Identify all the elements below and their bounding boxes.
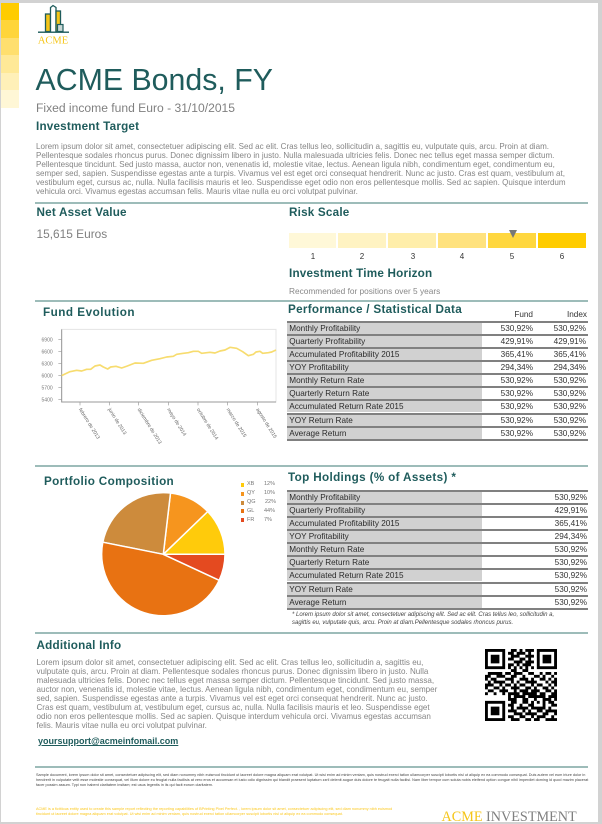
table: performance data: 294,34%: [501, 363, 533, 372]
line chart: fund evolution: febrero de 2013: [77, 407, 101, 441]
heading: net asset value: Net Asset Value: [36, 206, 127, 219]
line chart: fund evolution: junio de 2013: [106, 406, 127, 436]
footer disclaimer: Sample document, lorem ipsum dolor sit amet, consectetuer adipiscing elit, sed diam nonummy nibh euismod tincidunt ut laoreet dolore magna aliquam erat volutpat. Ut wisi enim ad minim veniam, quis nostrud exerci tation ullamcorper suscipit lobortis nisl ut aliquip ex ea commodo consequat. Duis autem vel eum iriure dolor in: [36, 772, 585, 776]
table: performance data: Accumulated Return Rate 2015: [289, 402, 404, 411]
additional info text: malesuada ultricies felis. Donec nec tellus eget massa semper dictum. Pellentesque tincidunt. Sed justo massa,: [36, 676, 434, 685]
pie legend: 22%: [265, 499, 276, 505]
table: performance data: 294,34%: [554, 363, 586, 372]
title: ACME Bonds, FY: [36, 64, 273, 97]
table: performance data: 530,92%: [501, 376, 533, 385]
heading: investment target: Investment Target: [36, 120, 139, 133]
net asset value figure: 15,615 Euros: [36, 227, 107, 241]
footer yellow note: tincidunt ut laoreet dolore magna aliquam erat volutpat. Ut wisi enim ad minim veniam, quis nostrud exerci tation ullamcorper suscipit lobortis nisl ut aliquip ex ea commodo consequat.: [36, 812, 343, 816]
investment target text: Pellentesque sodales rhoncus purus. Donec dignissim libero in justo. Nulla malesuada ultricies felis. Donec nec tellus eget massa semper dictum.: [36, 151, 554, 160]
table: performance data: Monthly Profitability: [289, 324, 360, 333]
support email: yoursupport@acmeinfomail.com: [38, 736, 178, 746]
table: performance data: 530,92%: [501, 416, 533, 425]
table: performance data: 530,92%: [554, 429, 586, 438]
subtitle: Fixed income fund Euro - 31/10/2015: [36, 100, 235, 114]
time horizon note: Recommended for positions over 5 years: [289, 286, 440, 296]
table: performance data: 530,92%: [501, 429, 533, 438]
risk scale: 3: [411, 252, 415, 261]
heading: top holdings: Top Holdings (% of Assets) *: [288, 471, 456, 484]
table: performance data: Average Return: [289, 429, 346, 438]
table: performance data: [287, 321, 588, 441]
table: top holdings: YOY Return Rate: [289, 584, 353, 594]
footer disclaimer: facer possim assum. Typi non habent claritatem insitam; est usus legentis in iis qui facit eorum claritatem.: [36, 782, 213, 786]
table: top holdings: Monthly Return Rate: [289, 544, 364, 554]
pie legend: GL: [247, 508, 254, 514]
table: top holdings: Quarterly Profitability: [289, 506, 365, 514]
pie legend: QG: [247, 499, 256, 505]
line chart: fund evolution: 6300: [42, 361, 53, 367]
table: top holdings: [287, 490, 588, 610]
table: performance data: 429,91%: [501, 337, 533, 346]
table: performance data: 530,92%: [554, 416, 586, 425]
column header: fund: Fund: [514, 310, 533, 319]
table: performance data: 530,92%: [501, 324, 533, 333]
table: top holdings: Accumulated Profitability 2015: [289, 518, 399, 528]
table: top holdings: 294,34%: [555, 532, 587, 540]
heading: portfolio composition: Portfolio Composition: [44, 475, 174, 488]
table: performance data: Quarterly Return Rate: [289, 389, 369, 398]
heading: fund evolution: Fund Evolution: [43, 306, 135, 319]
footer disclaimer: [36, 772, 588, 787]
table: performance data: Monthly Return Rate: [289, 376, 364, 385]
table: performance data: Accumulated Profitability 2015: [289, 350, 399, 359]
additional info text: vulputate quis, arcu. Proin at diam. Pellentesque sodales rhoncus purus. Donec dignissim libero in justo. Nulla: [36, 667, 428, 676]
footnote: [292, 612, 554, 626]
table: top holdings: 530,92%: [555, 584, 587, 594]
pie legend: [241, 481, 276, 523]
table: top holdings: 429,91%: [555, 506, 587, 514]
heading: risk scale: Risk Scale: [289, 206, 349, 219]
additional info text: odio non eros pellentesque mollis. Sed ac sapien. Quisque interdum vehicula orci. Vivamus egestas accumsan: [36, 712, 431, 721]
QR code: [485, 649, 557, 721]
line chart: fund evolution: 5700: [42, 385, 53, 391]
investment target text: vestibulum eget, cursus ac, nulla. Nulla facilisis mauris et leo. Suspendisse eget odio non eros pellentesque mollis. Sed ac sapien. Quisque interdum: [36, 178, 566, 187]
investment target text: Lorem ipsum dolor sit amet, consectetuer adipiscing elit. Sed ac elit. Cras tellus leo, sollicitudin a, sagittis eu, vulputate quis, arcu. Proin at diam.: [36, 142, 549, 151]
table: performance data: Quarterly Profitability: [289, 337, 365, 346]
table: performance data: 530,92%: [554, 376, 586, 385]
investment target text: Pellentesque tincidunt. Sed justo massa, auctor non, venenatis id, molestie vitae, lectus. Aenean ligula nibh, condimentum eget, condimentum eu,: [36, 160, 555, 169]
logo: [38, 4, 69, 46]
additional info text: Cras est quam, vestibulum at, vestibulum eget, cursus ac, nulla. Nulla facilisis mauris et leo. Suspendisse eget: [36, 703, 430, 712]
column header: index: Index: [567, 310, 587, 319]
table: performance data: 365,41%: [554, 350, 586, 359]
footer yellow note: ACME is a fictitious entity used to create this sample report reflecting the reporting capabilities of BPrinting Pixel Perfect. , lorem ipsum dolor sit amet, consectetuer adipiscing elit, sed diam nonummy nibh euismod: [36, 807, 392, 811]
table: top holdings: Accumulated Return Rate 2015: [289, 570, 404, 580]
investment target text: semper sed, sapien. Suspendisse egestas ante a turpis. Vivamus vel est eget orci consequat hendrerit. Nunc ac justo. Cras est quam, vestibulum at,: [36, 169, 565, 178]
table: performance data: YOY Profitability: [289, 363, 349, 372]
risk scale: 1: [311, 252, 315, 261]
line chart: fund evolution: octubre de 2014: [195, 407, 219, 441]
risk scale: 6: [560, 252, 564, 261]
table: top holdings: 530,92%: [555, 544, 587, 554]
footer disclaimer: hendrerit in vulputate velit esse molestie consequat, vel illum dolore eu feugiat nulla facilisis at vero eros et accumsan et iusto odio dignissim qui blandit praesent luptatum zzril delenit augue duis dolore te feugait nulla facilisi. Nam liber tempor cum soluta nobis eleifend option congue nihil imperdiet doming id quod mazim placerat: [36, 778, 588, 782]
table: top holdings: 530,92%: [555, 570, 587, 580]
table: top holdings: 530,92%: [555, 558, 587, 566]
line chart: fund evolution: marzo de 2015: [225, 407, 248, 439]
table: top holdings: 530,92%: [555, 598, 587, 606]
table: performance data: YOY Return Rate: [289, 416, 353, 425]
pie legend: QY: [247, 490, 255, 496]
table: performance data: 365,41%: [501, 350, 533, 359]
pie legend: FR: [247, 517, 254, 523]
additional info text: Lorem ipsum dolor sit amet, consectetuer adipiscing elit. Sed ac elit. Cras tellus leo, sollicitudin a, sagittis eu,: [36, 658, 423, 666]
additional info text: [36, 658, 438, 730]
heading: additional info: Additional Info: [36, 639, 121, 652]
pie legend: 10%: [264, 490, 275, 496]
investment target text: [36, 142, 566, 196]
table: performance data: 530,92%: [501, 389, 533, 398]
table: performance data: 530,92%: [554, 389, 586, 398]
risk scale: 5: [510, 252, 514, 261]
line chart: fund evolution: 5400: [42, 397, 53, 403]
table: performance data: 429,91%: [554, 337, 586, 346]
table: top holdings: 530,92%: [555, 492, 587, 502]
pie legend: 7%: [264, 517, 272, 523]
footnote: sagittis eu, vulputate quis, arcu. Proin at diam.Pellentesque sodales rhoncus purus.: [292, 620, 513, 626]
table: performance data: 530,92%: [501, 402, 533, 411]
heading: performance data: Performance / Statistical Data: [288, 303, 462, 316]
line chart: fund evolution: 6600: [42, 349, 53, 355]
table: performance data: 530,92%: [554, 324, 586, 333]
investment target text: vehicula orci. Vivamus egestas accumsan felis. Mauris vitae nulla eu orci volutpat pulvinar.: [36, 187, 358, 196]
risk scale: [289, 230, 586, 261]
pie chart: portfolio composition: [102, 493, 224, 615]
footer yellow note: [36, 807, 392, 816]
table: top holdings: 365,41%: [555, 518, 587, 528]
colour ladder: [1, 3, 19, 108]
line chart: fund evolution: mayo de 2014: [165, 407, 187, 437]
table: top holdings: Quarterly Return Rate: [289, 558, 369, 566]
line chart: fund evolution: [42, 329, 278, 445]
risk scale: 4: [460, 252, 464, 261]
line chart: fund evolution: 6900: [42, 337, 53, 343]
table: top holdings: Monthly Profitability: [289, 492, 360, 502]
additional info text: sed, sapien. Suspendisse egestas ante a turpis. Vivamus vel est eget orci consequat hendrerit. Nunc ac justo.: [36, 694, 428, 703]
pie legend: 12%: [264, 481, 275, 487]
footnote: * Lorem ipsum dolor sit amet, consectetuer adipiscing elit. Sed ac elit. Cras tellus leo, sollicitudin a,: [292, 612, 554, 618]
additional info text: auctor non, venenatis id, molestie vitae, lectus. Aenean ligula nibh, condimentum eget, condimentum eu, semper: [36, 685, 437, 694]
heading: investment time horizon: Investment Time Horizon: [289, 267, 432, 280]
pie legend: 44%: [264, 508, 275, 514]
line chart: fund evolution: 6000: [42, 373, 53, 379]
line chart: fund evolution: diciembre de 2013: [136, 407, 163, 445]
table: top holdings: Average Return: [289, 598, 346, 606]
line chart: fund evolution: agosto de 2015: [254, 407, 278, 440]
table: performance data: 530,92%: [554, 402, 586, 411]
additional info text: felis. Mauris vitae nulla eu orci volutpat pulvinar.: [36, 721, 207, 730]
risk scale: 2: [360, 252, 364, 261]
pie legend: XB: [247, 481, 254, 487]
table: top holdings: YOY Profitability: [289, 532, 349, 540]
